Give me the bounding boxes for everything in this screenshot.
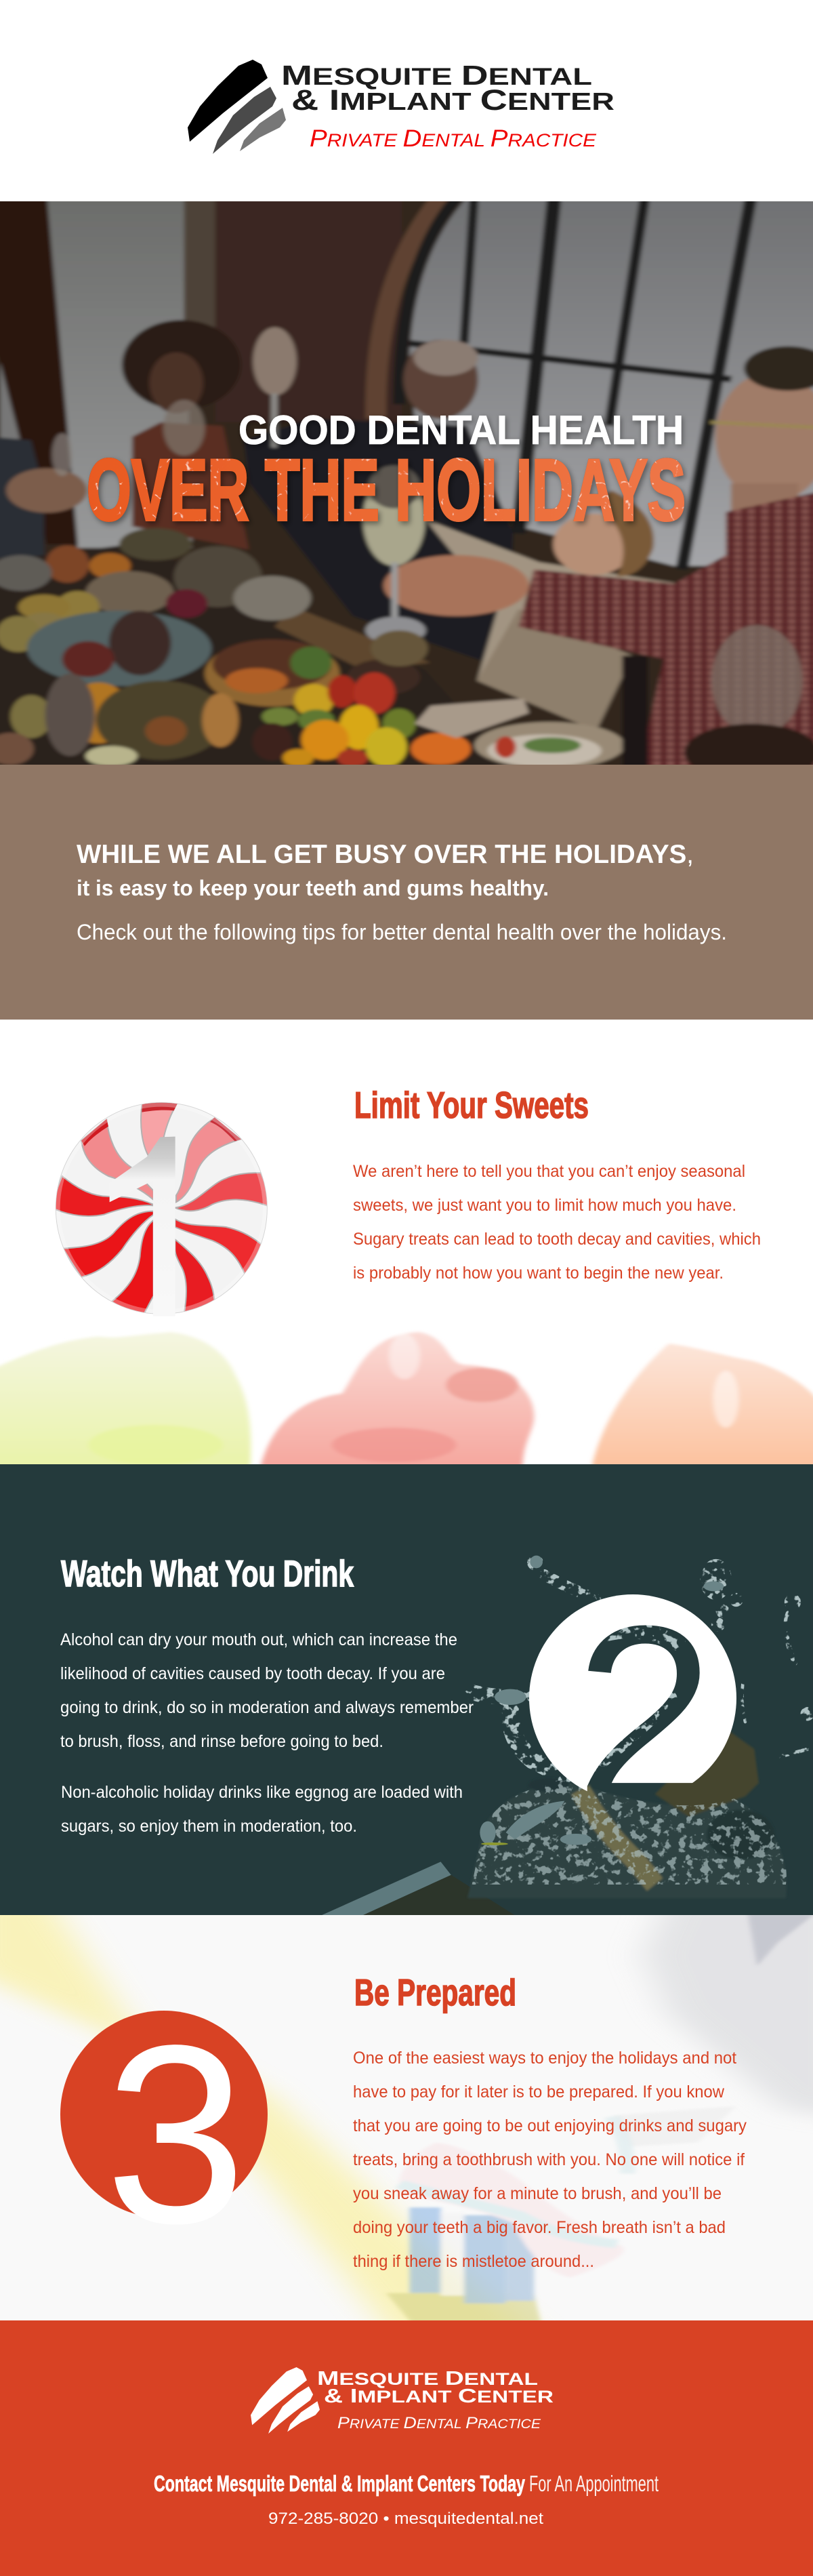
icon: white circle with cut-out number 2 (529, 1594, 736, 1802)
footer logo name line 1: M ESQUITE D ENTAL (317, 2368, 538, 2390)
hero title line 1: GOOD DENTAL HEALTH (238, 407, 684, 453)
tip 2 text: likelihood of cavities caused by tooth decay. If you are (60, 1664, 445, 1683)
tip 1 heading: Limit Your Sweets (354, 1084, 589, 1126)
tip 1 text: sweets, we just want you to limit how much you have. (353, 1196, 736, 1215)
footer logo name line 2: & I MPLANT C ENTER (324, 2386, 554, 2407)
tip 1 text: is probably not how you want to begin the new year. (353, 1264, 724, 1283)
tip 2 heading: Watch What You Drink (61, 1552, 354, 1594)
tip 3 text: One of the easiest ways to enjoy the holidays and not (353, 2049, 736, 2068)
footer contact details: 972-285-8020 • mesquitedental.net (268, 2510, 543, 2528)
panel: footer (0, 2320, 813, 2576)
background gummy candies (0, 1331, 813, 1464)
footer logo tagline: PRIVATE DENTAL PRACTICE (337, 2414, 541, 2432)
tip 3 text: have to pay for it later is to be prepared. If you know (353, 2082, 725, 2101)
logo tagline: PRIVATE DENTAL PRACTICE (310, 125, 597, 152)
tip 2 text (60, 1630, 474, 1836)
tip 3 text (353, 2049, 747, 2271)
panel: intro band (0, 765, 813, 1020)
tip 2 text: sugars, so enjoy them in moderation, too. (61, 1817, 357, 1836)
panel: tip 2 watch what you drink (0, 1464, 813, 1918)
tip 2 text: going to drink, do so in moderation and always remember (60, 1698, 474, 1717)
intro text: Check out the following tips for better dental health over the holidays. (77, 920, 727, 944)
intro subheading: it is easy to keep your teeth and gums healthy. (77, 876, 549, 900)
panel: tip 1 limit your sweets (0, 1090, 813, 1464)
tip 1 text: Sugary treats can lead to tooth decay and cavities, which (353, 1230, 761, 1249)
tip 1 text: We aren’t here to tell you that you can’t enjoy seasonal (353, 1162, 745, 1181)
hero scene illustration (0, 193, 813, 781)
icon: peppermint candy with number 1 (56, 1102, 268, 1314)
footer call to action: Contact Mesquite Dental & Implant Centers Today (154, 2471, 525, 2496)
tip 3 text: doing your teeth a big favor. Fresh breath isn’t a bad (353, 2218, 726, 2237)
panel: hero photo of holiday dinner (0, 193, 813, 781)
tip 2 text: Non-alcoholic holiday drinks like eggnog are loaded with (61, 1783, 463, 1802)
icon: red circle with number 3: 3 (105, 1993, 247, 2276)
icon: red circle with number 3 (60, 2011, 268, 2214)
panel: tip 3 be prepared (0, 1896, 813, 2337)
background toothbrush and toothpaste tube (0, 1896, 813, 2337)
intro heading: WHILE WE ALL GET BUSY OVER THE HOLIDAYS, (77, 840, 694, 869)
icon: footer logo swooshes (251, 2367, 320, 2434)
icon: logo swooshes (188, 60, 286, 154)
tip 3 text: treats, bring a toothbrush with you. No one will notice if (353, 2150, 745, 2169)
logo name line 1: M ESQUITE D ENTAL (281, 60, 592, 91)
tip 2 text: Alcohol can dry your mouth out, which can increase the (60, 1630, 457, 1649)
number 1 (110, 1136, 175, 1314)
tip 3 heading: Be Prepared (354, 1971, 516, 2013)
tip 2 text: to brush, floss, and rinse before going to bed. (60, 1732, 383, 1751)
footer call to action: For An Appointment (529, 2471, 659, 2496)
panel: header logo (0, 0, 813, 201)
logo name line 2: & I MPLANT C ENTER (291, 84, 614, 117)
background drink splash and bottle (316, 1546, 813, 1918)
tip 3 text: you sneak away for a minute to brush, and you’ll be (353, 2184, 722, 2203)
tip 3 text: thing if there is mistletoe around... (353, 2252, 594, 2271)
number 1: 1 (123, 1807, 261, 2125)
tip 1 text (353, 1162, 761, 1283)
tip 3 text: that you are going to be out enjoying drinks and sugary (353, 2116, 747, 2135)
